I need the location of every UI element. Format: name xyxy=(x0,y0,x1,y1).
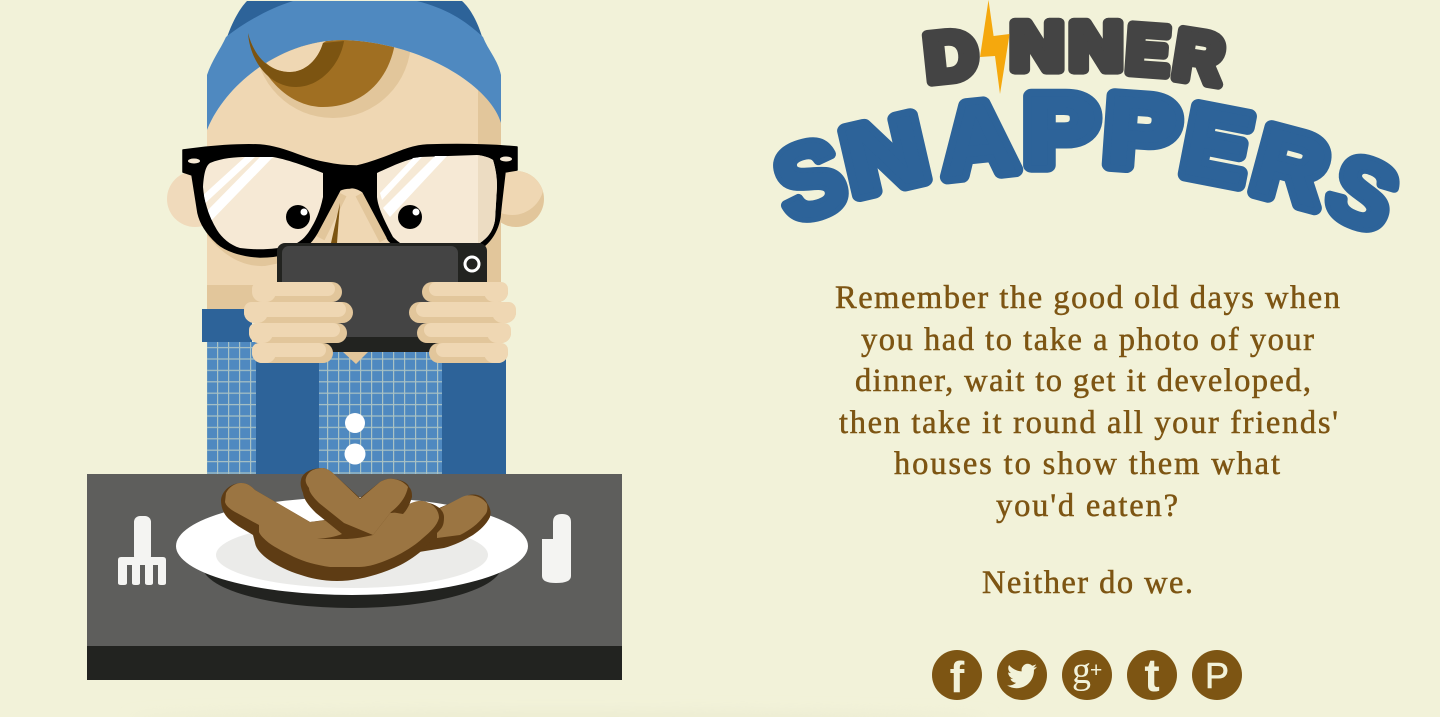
icon: google plus xyxy=(1062,650,1112,700)
icon: twitter xyxy=(997,650,1047,700)
intro text: Neither do we. xyxy=(982,565,1193,601)
intro text: dinner, wait to get it developed, xyxy=(855,363,1311,399)
lens glare xyxy=(200,156,447,224)
logo word: DINNER: N xyxy=(1010,9,1064,85)
nose xyxy=(320,194,384,243)
intro text: houses to show them what xyxy=(894,446,1280,482)
head xyxy=(207,40,501,310)
logo word: DINNER: R xyxy=(1169,15,1229,100)
plate xyxy=(176,497,528,608)
intro text: Remember the good old days when xyxy=(835,280,1340,316)
character illustration xyxy=(167,0,544,474)
eyes xyxy=(286,205,422,229)
logo word: DINNER: D xyxy=(921,15,981,96)
frame rivets xyxy=(188,156,512,164)
icon: tumblr xyxy=(1127,649,1177,701)
intro text: you had to take a photo of your xyxy=(861,322,1314,358)
table xyxy=(87,474,622,680)
hair curl xyxy=(248,33,344,87)
intro text: you'd eaten? xyxy=(996,488,1178,524)
icon: facebook: f xyxy=(950,653,965,702)
top sausage xyxy=(301,468,412,539)
icon: lightning bolt xyxy=(980,0,1010,94)
icon: google plus: + xyxy=(1090,659,1102,682)
logo word: DINNER: N xyxy=(1069,9,1123,85)
logo word: SNAPPERS: S xyxy=(1312,133,1413,255)
social icons xyxy=(932,649,1242,702)
right hand xyxy=(409,282,516,363)
ears xyxy=(167,171,544,227)
logo word: SNAPPERS: N xyxy=(834,95,937,217)
logo word: SNAPPERS xyxy=(761,74,1413,255)
hat xyxy=(207,1,501,130)
intro text: then take it round all your friends' xyxy=(839,405,1338,441)
plate with food xyxy=(176,468,528,608)
icon: pinterest xyxy=(1192,650,1242,700)
phone xyxy=(277,243,487,352)
logo word: DINNER: E xyxy=(1124,12,1172,90)
icon: knife xyxy=(542,514,571,583)
logo xyxy=(761,0,1413,255)
logo word: SNAPPERS: P xyxy=(1101,74,1183,191)
icon: google plus: g xyxy=(1072,650,1091,692)
hair xyxy=(260,40,410,118)
logo word: SNAPPERS: S xyxy=(761,115,859,246)
main sausage xyxy=(221,483,444,581)
logo word: SNAPPERS: A xyxy=(936,81,1021,199)
intro text xyxy=(835,280,1340,601)
shirt xyxy=(202,309,506,474)
icon: fork xyxy=(118,516,166,585)
right sausage xyxy=(419,494,491,552)
logo word: SNAPPERS: P xyxy=(1024,76,1098,187)
icon: tumblr: t xyxy=(1144,649,1160,701)
logo word: SNAPPERS: E xyxy=(1175,84,1259,206)
logo word: DINNER xyxy=(921,9,1229,100)
logo word: SNAPPERS: R xyxy=(1243,106,1339,229)
glasses xyxy=(183,145,517,257)
icon: pinterest: P xyxy=(1205,655,1229,696)
glasses shadow xyxy=(207,222,285,266)
icon: facebook xyxy=(932,650,982,702)
left hand xyxy=(244,282,353,363)
